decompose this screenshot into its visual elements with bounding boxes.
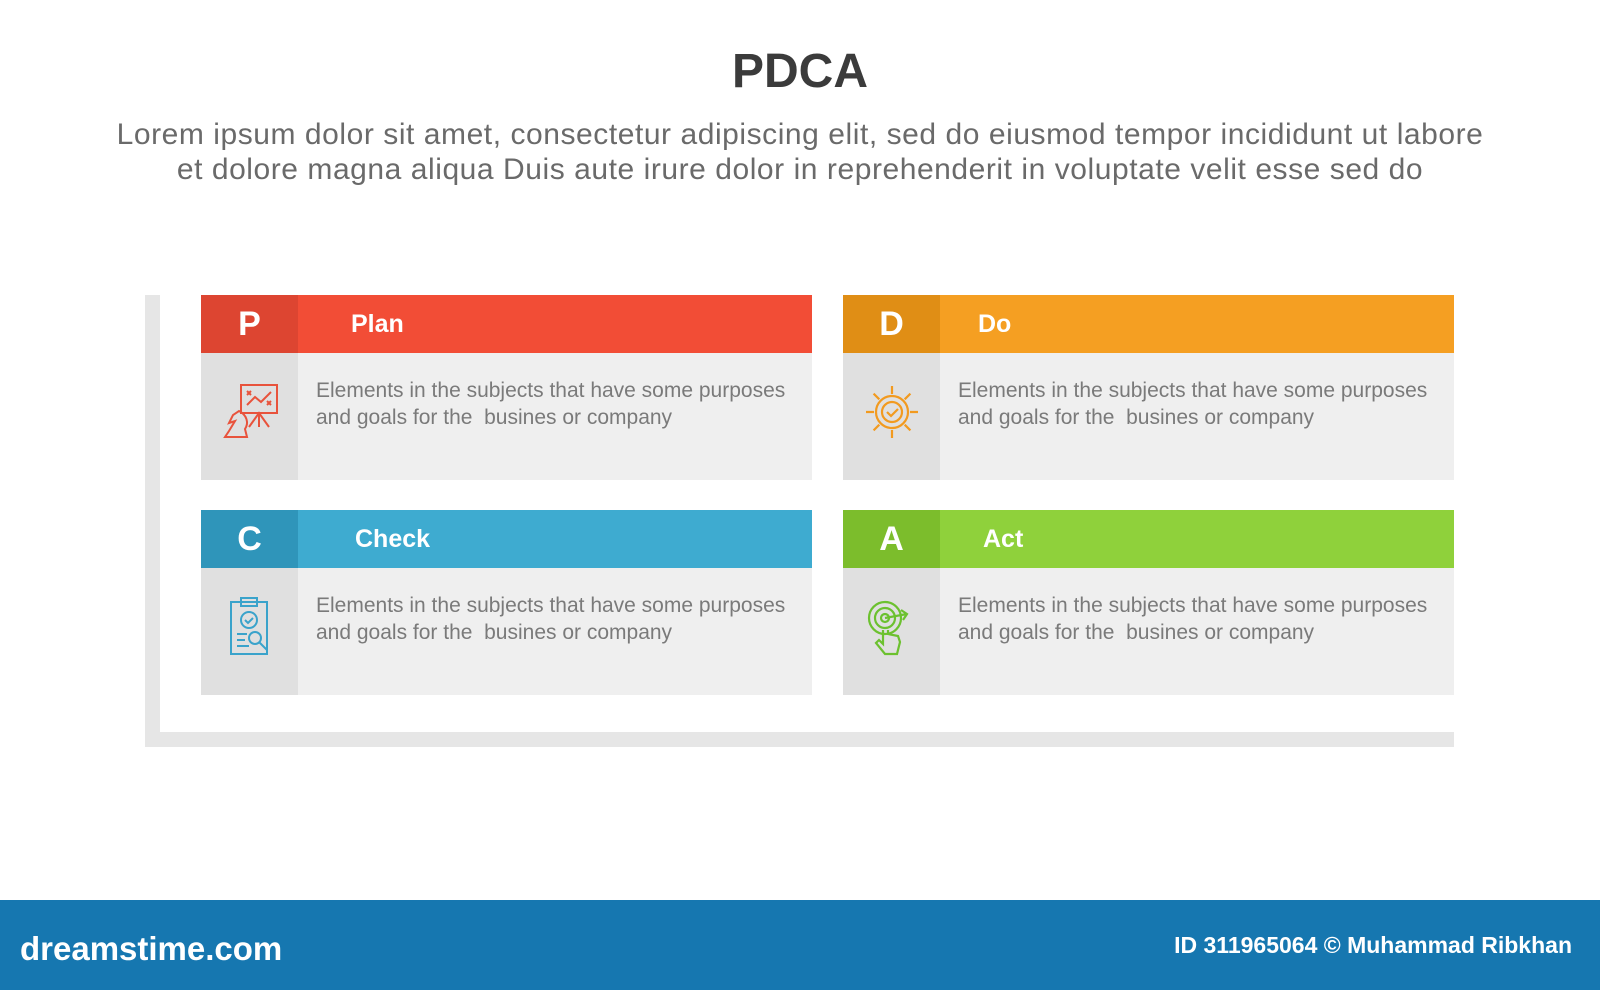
title: PDCA [732,45,868,98]
panel: plan: Plan [351,310,404,338]
subtitle [117,118,1483,186]
icon: gear check [843,353,940,480]
panel: do [843,295,1454,480]
panel: check: and goals for the busines or company [316,621,672,644]
subtitle: Lorem ipsum dolor sit amet, consectetur adipiscing elit, sed do eiusmod tempor incididunt ut labore [117,118,1483,151]
footer bar [0,900,1600,990]
icon: strategy board [201,353,298,480]
panel: do: Elements in the subjects that have some purposes [958,379,1427,402]
panel: check: C [237,520,262,558]
panel: act: A [879,520,904,558]
panel: act [843,510,1454,695]
panel: plan: and goals for the busines or company [316,406,672,429]
panel: plan: Elements in the subjects that have some purposes [316,379,785,402]
panel: do: D [879,305,904,343]
panel: do: Do [978,310,1011,338]
panel: check [201,510,812,695]
footer logo: dreamstime.com [20,930,282,967]
panel: act: Elements in the subjects that have some purposes [958,594,1427,617]
icon: target hand [843,568,940,695]
panel: act: and goals for the busines or company [958,621,1314,644]
subtitle: et dolore magna aliqua Duis aute irure dolor in reprehenderit in voluptate velit esse sed do [177,153,1423,186]
panel: check: Elements in the subjects that have some purposes [316,594,785,617]
panel: check: Check [355,525,430,553]
panel: act: Act [983,525,1023,553]
footer credit: ID 311965064 © Muhammad Ribkhan [1174,932,1572,958]
panel: plan [201,295,812,480]
frame: L-shaped bracket [145,295,1454,747]
panel: do: and goals for the busines or company [958,406,1314,429]
icon: clipboard [201,568,298,695]
panel: plan: P [238,305,261,343]
